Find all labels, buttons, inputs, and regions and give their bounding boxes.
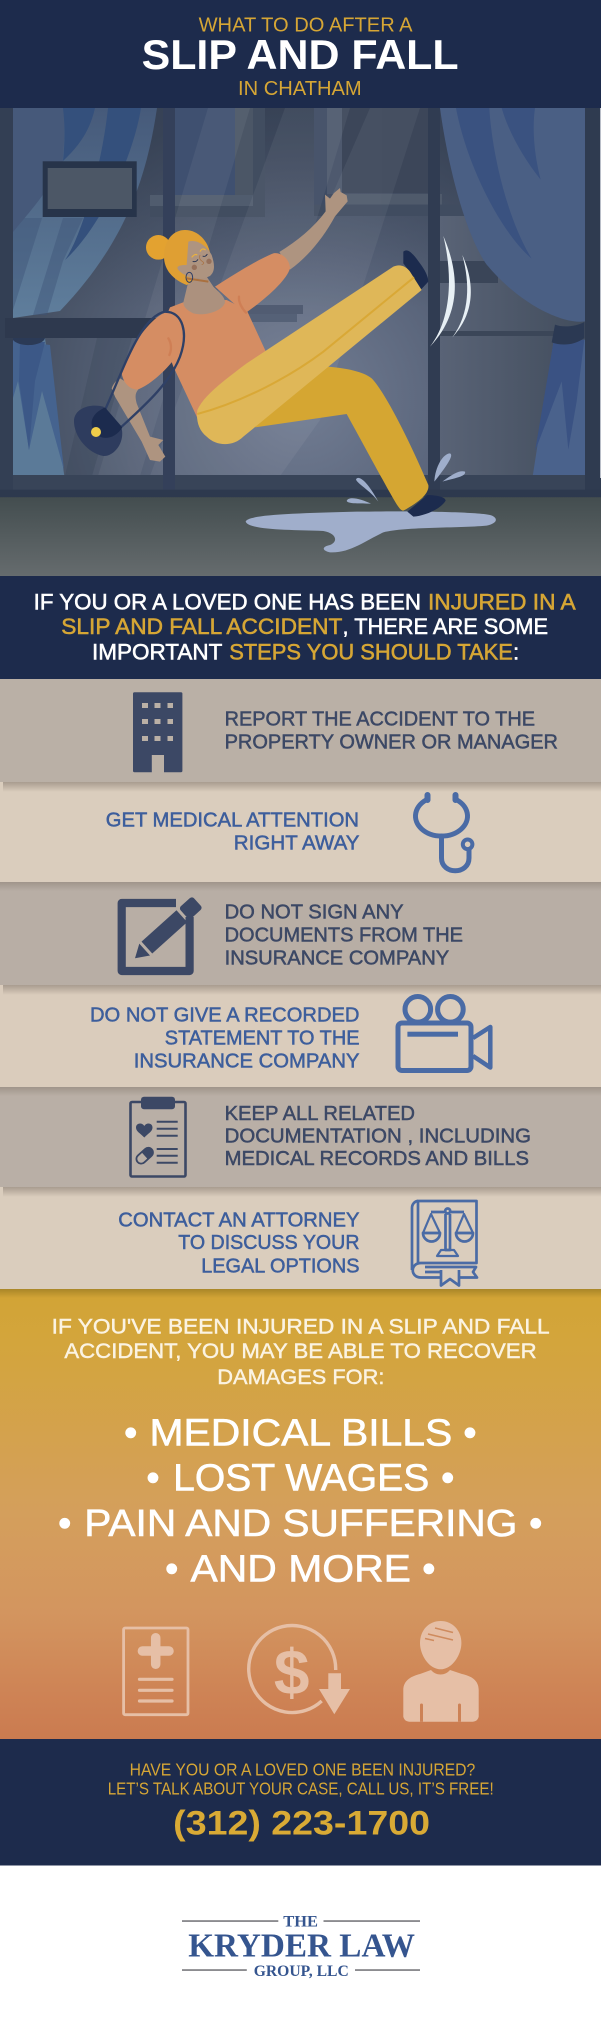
- back leg, shoe, puddle and splashes: [246, 367, 496, 552]
- step 4: do not give a recorded statement: DO NOT GIVE A RECORDED: [90, 1004, 360, 1026]
- front leg, raised shoe and motion lines: [197, 236, 471, 444]
- step 5: keep all related documentation: KEEP ALL RELATED: [225, 1103, 415, 1125]
- intro band: IF YOU OR A LOVED ONE HAS BEEN: [34, 589, 421, 614]
- icon: dollar with down arrow: [249, 1626, 350, 1714]
- logo: the kryder law group: [182, 1914, 420, 1980]
- damages panel: [0, 1289, 601, 1739]
- call to action band: LET’S TALK ABOUT YOUR CASE, CALL US, IT’S FREE!: [108, 1778, 494, 1798]
- damages list: •: [463, 1412, 477, 1454]
- step 4: do not give a recorded statement: STATEMENT TO THE: [165, 1028, 360, 1050]
- step 2: get medical attention: [0, 782, 601, 882]
- step 3: do not sign documents: INSURANCE COMPANY: [225, 947, 450, 969]
- picture frame: [43, 161, 137, 217]
- icon: medical document: [124, 1628, 188, 1715]
- call to action band: HAVE YOU OR A LOVED ONE BEEN INJURED?: [130, 1759, 475, 1779]
- icon: note and pencil: [122, 896, 203, 971]
- damages list: •: [422, 1548, 436, 1590]
- right curtain: [440, 108, 585, 481]
- step 2: get medical attention: GET MEDICAL ATTENTION: [106, 810, 359, 832]
- bun and hair: [146, 235, 171, 260]
- light streaks: [98, 108, 420, 476]
- raised sleeve: [215, 253, 290, 313]
- step 6: contact an attorney: LEGAL OPTIONS: [201, 1255, 360, 1277]
- torso, head and bag: [74, 230, 290, 462]
- title: slip and fall: SLIP AND FALL: [142, 31, 459, 78]
- step 1: report the accident: PROPERTY OWNER OR MANAGER: [225, 732, 558, 754]
- intro band: :: [513, 639, 519, 664]
- damages list: PAIN AND SUFFERING: [84, 1503, 517, 1545]
- intro band: STEPS YOU SHOULD TAKE: [229, 639, 513, 664]
- damages intro text: IF YOU'VE BEEN INJURED IN A SLIP AND FALL: [52, 1313, 550, 1338]
- damages list: •: [58, 1503, 71, 1545]
- damages list: LOST WAGES: [173, 1458, 429, 1500]
- step 4: do not give a recorded statement: INSURANCE COMPANY: [134, 1050, 360, 1072]
- heading: in chatham: IN CHATHAM: [238, 78, 362, 100]
- damages intro text: DAMAGES FOR:: [217, 1364, 384, 1389]
- damages list: •: [529, 1503, 542, 1545]
- call to action band: [0, 1739, 601, 1866]
- step 2: get medical attention: RIGHT AWAY: [234, 832, 360, 854]
- face: [177, 241, 214, 279]
- step 3: do not sign documents: [0, 882, 601, 985]
- damages intro text: [52, 1313, 550, 1389]
- bag: [74, 406, 122, 456]
- step 3: do not sign documents: DO NOT SIGN ANY: [225, 902, 404, 924]
- header band: [0, 0, 601, 108]
- damages list: •: [146, 1458, 160, 1500]
- intro band: IMPORTANT: [92, 639, 223, 664]
- strap: [105, 312, 184, 427]
- illustration: woman slipping on a puddle: [0, 108, 601, 577]
- icon: stethoscope: [416, 795, 472, 871]
- room background: [0, 108, 601, 577]
- damages list: •: [165, 1548, 178, 1590]
- damages list: [58, 1412, 542, 1590]
- lower arm: [112, 378, 165, 462]
- intro band: [0, 576, 601, 679]
- icon: video camera: [398, 996, 490, 1070]
- step 6: contact an attorney: CONTACT AN ATTORNEY: [118, 1209, 360, 1231]
- heading: what to do after a: WHAT TO DO AFTER A: [199, 13, 413, 36]
- logo: the kryder law group: GROUP, LLC: [254, 1963, 349, 1980]
- sleeve: [122, 312, 182, 389]
- damages list: AND MORE: [190, 1548, 411, 1590]
- step 5: keep all related documentation: DOCUMENTATION , INCLUDING: [225, 1125, 531, 1147]
- icon: medical clipboard: [130, 1097, 186, 1176]
- step 4: do not give a recorded statement: [0, 985, 601, 1087]
- phone number: (312) 223-1700: [173, 1805, 430, 1843]
- icon: building: [133, 692, 182, 772]
- icon: injured person: [403, 1621, 479, 1722]
- intro band: SLIP AND FALL ACCIDENT: [61, 614, 343, 639]
- neck: [183, 277, 225, 314]
- damages list: MEDICAL BILLS: [150, 1412, 452, 1454]
- step 3: do not sign documents: DOCUMENTS FROM THE: [225, 924, 463, 946]
- torso: [160, 300, 267, 420]
- step 5: keep all related documentation: [0, 1087, 601, 1187]
- raised arm and hand: [279, 188, 348, 270]
- step 6: contact an attorney: [0, 1187, 601, 1289]
- icon: law book with scales: [412, 1201, 477, 1286]
- step 5: keep all related documentation: MEDICAL RECORDS AND BILLS: [225, 1148, 529, 1170]
- step 1: report the accident: REPORT THE ACCIDENT TO THE: [225, 708, 535, 730]
- icon: dollar with down arrow: $: [274, 1636, 309, 1708]
- intro band: INJURED IN A: [428, 589, 576, 614]
- logo: the kryder law group: KRYDER LAW: [188, 1928, 415, 1965]
- bench: [5, 318, 163, 338]
- damages list: •: [441, 1458, 454, 1500]
- damages intro text: ACCIDENT, YOU MAY BE ABLE TO RECOVER: [64, 1338, 537, 1363]
- back window panes: [150, 108, 585, 476]
- logo: the kryder law group: THE: [283, 1914, 318, 1931]
- step 1: report the accident: [0, 679, 601, 782]
- damages list: •: [124, 1412, 137, 1454]
- window frame posts and band: [0, 108, 601, 490]
- floor: [0, 497, 601, 577]
- intro band: , THERE ARE SOME: [342, 614, 548, 639]
- left curtain: [13, 108, 157, 481]
- step 6: contact an attorney: TO DISCUSS YOUR: [178, 1232, 360, 1254]
